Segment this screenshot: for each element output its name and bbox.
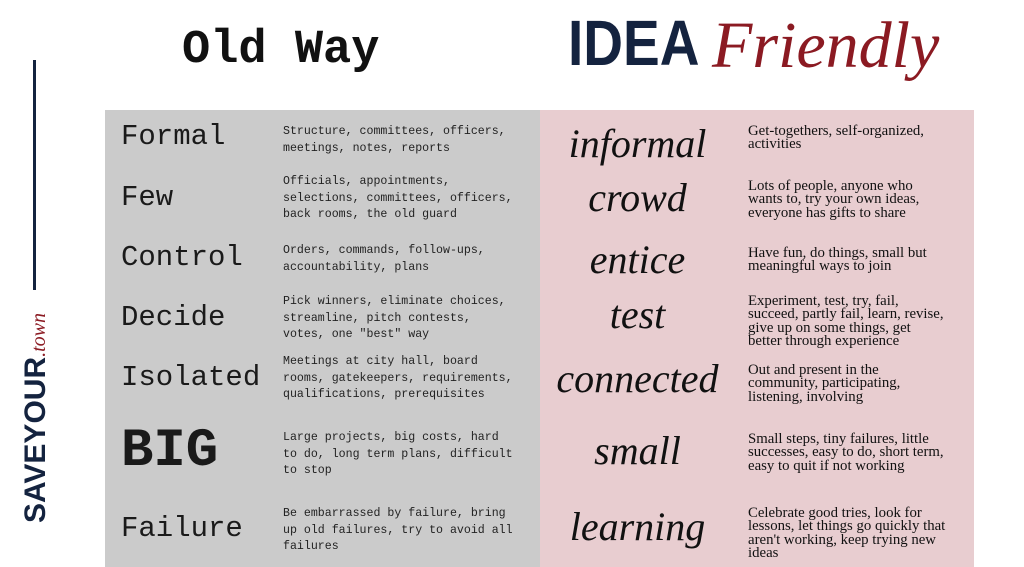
desc big: to do, long term plans, difficult <box>283 448 513 460</box>
desc few: selections, committees, officers, <box>283 192 513 204</box>
title: IDEA Friendly <box>568 7 940 82</box>
desc few: Officials, appointments, <box>283 175 450 188</box>
desc decide: votes, one "best" way <box>283 328 429 341</box>
desc entice: Have fun, do things, small but <box>748 245 927 261</box>
desc formal: Structure, committees, officers, <box>283 125 506 138</box>
desc learning: lessons, let things go quickly that <box>748 518 945 534</box>
desc control <box>283 244 485 274</box>
desc informal: Get-togethers, self-organized, <box>748 123 924 139</box>
text: Friendly <box>712 9 939 82</box>
desc entice <box>748 245 927 274</box>
word test: test <box>610 292 665 337</box>
desc big <box>283 431 513 477</box>
desc connected <box>748 362 900 405</box>
word learning: learning <box>570 504 705 549</box>
panel: old way <box>105 110 540 567</box>
panel: idea friendly <box>540 110 974 567</box>
desc few: back rooms, the old guard <box>283 208 457 221</box>
title: Old Way: Old Way <box>182 24 379 77</box>
desc small: successes, easy to do, short term, <box>748 444 944 460</box>
row: control: Control <box>121 241 243 274</box>
logo: saveyour.town: SAVEYOUR.town <box>19 313 52 523</box>
desc failure: Be embarrassed by failure, bring <box>283 507 506 520</box>
desc control: accountability, plans <box>283 260 429 274</box>
desc learning: Celebrate good tries, look for <box>748 505 922 521</box>
desc control: Orders, commands, follow-ups, <box>283 244 485 257</box>
desc crowd <box>748 178 919 221</box>
desc informal <box>748 123 924 152</box>
desc learning: ideas <box>748 545 778 561</box>
desc isolated: rooms, gatekeepers, requirements, <box>283 372 513 384</box>
desc failure <box>283 507 513 553</box>
word connected: connected <box>556 356 719 401</box>
desc learning <box>748 505 946 561</box>
desc crowd: everyone has gifts to share <box>748 205 906 221</box>
desc entice: meaningful ways to join <box>748 258 891 274</box>
desc failure: up old failures, try to avoid all <box>283 524 513 536</box>
desc decide: Pick winners, eliminate choices, <box>283 295 506 308</box>
desc isolated: Meetings at city hall, board <box>283 355 478 368</box>
desc isolated: qualifications, prerequisites <box>283 388 485 401</box>
row: failure: Failure <box>121 512 243 545</box>
word small: small <box>594 428 681 473</box>
word entice: entice <box>590 237 685 282</box>
desc small <box>748 431 944 474</box>
title: IDEA Friendly: IDEA <box>568 7 699 79</box>
word informal: informal <box>569 121 706 166</box>
row: few: Few <box>121 181 173 214</box>
row: big: BIG <box>121 421 218 482</box>
desc decide <box>283 295 506 341</box>
desc big: Large projects, big costs, hard <box>283 431 499 444</box>
desc big: to stop <box>283 464 332 477</box>
desc decide: streamline, pitch contests, <box>283 312 471 324</box>
desc test: give up on some things, get <box>748 320 911 336</box>
desc formal <box>283 125 506 154</box>
desc crowd: Lots of people, anyone who <box>748 178 913 194</box>
desc small: easy to quit if not working <box>748 458 905 474</box>
desc informal: activities <box>748 136 801 152</box>
row: formal: Formal <box>121 120 225 153</box>
desc small: Small steps, tiny failures, little <box>748 431 929 447</box>
desc test <box>748 293 944 349</box>
desc few <box>283 175 513 221</box>
desc connected: community, participating, <box>748 375 900 391</box>
desc test: better through experience <box>748 333 899 349</box>
desc learning: aren't working, keep trying new <box>748 532 936 548</box>
desc failure: failures <box>283 540 339 553</box>
row: isolated: Isolated <box>121 361 260 394</box>
desc connected: listening, involving <box>748 389 863 405</box>
desc crowd: wants to, try your own ideas, <box>748 191 919 207</box>
desc connected: Out and present in the <box>748 362 879 378</box>
desc isolated <box>283 355 513 401</box>
desc test: Experiment, test, try, fail, <box>748 293 899 309</box>
row: decide: Decide <box>121 301 225 334</box>
desc test: succeed, partly fail, learn, revise, <box>748 306 944 322</box>
vertical rule <box>33 60 36 290</box>
word crowd: crowd <box>588 175 687 220</box>
desc formal: meetings, notes, reports <box>283 142 450 154</box>
